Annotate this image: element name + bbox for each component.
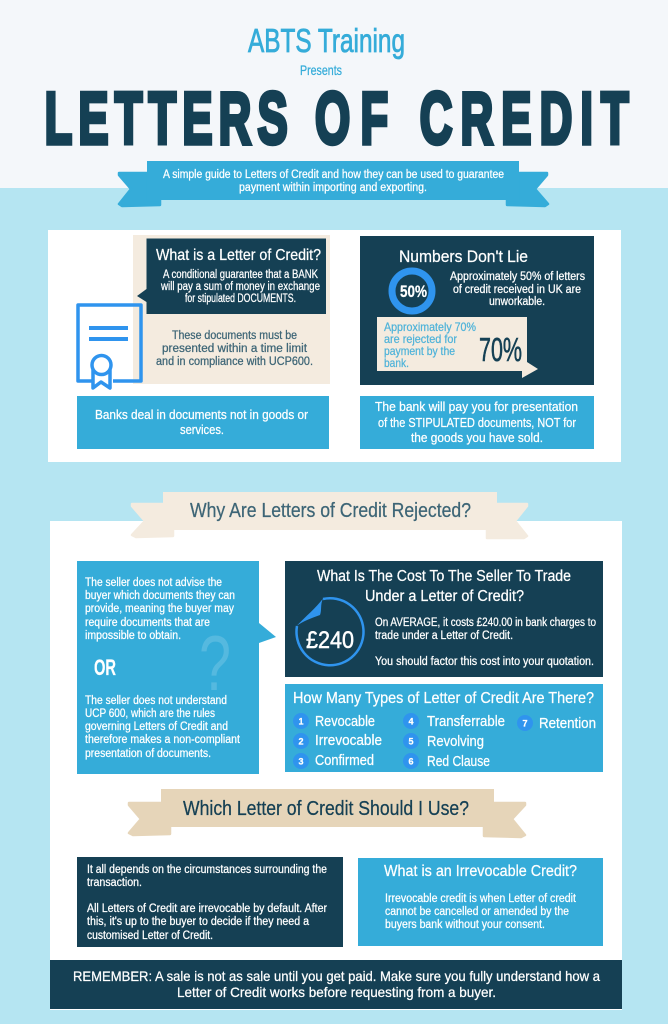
banner: which letter of credit should I use: Which Letter of Credit Should I Use? xyxy=(183,798,469,820)
list item 4: Transferrable xyxy=(427,714,505,730)
callout: reasons for rejection: impossible to obtain. xyxy=(85,630,181,642)
callout: what is a letter of credit xyxy=(137,238,326,314)
panel: numbers don't lie xyxy=(360,236,594,385)
list item 4 xyxy=(403,713,505,730)
title: OF xyxy=(315,77,388,159)
panel: numbers don't lie: of credit received in UK are xyxy=(453,284,581,296)
panel: beige backing xyxy=(133,235,330,384)
list item 2: 2 xyxy=(298,736,304,746)
callout: banks deal in documents: Banks deal in documents not in goods or xyxy=(95,407,309,422)
panel: cost to the seller: You should factor this cost into your quotation. xyxy=(375,656,594,668)
title: CREDIT xyxy=(420,77,629,159)
list item 6: Red Clause xyxy=(427,754,490,770)
panel: numbers don't lie: Numbers Don't Lie xyxy=(399,247,528,266)
panel: what is an irrevocable credit: buyers bank without your consent. xyxy=(385,919,545,931)
panel: it all depends xyxy=(77,857,343,947)
icon: certificate xyxy=(78,305,141,388)
list item 2: Irrevocable xyxy=(315,733,382,749)
ribbon: subtitle xyxy=(119,161,548,206)
panel: it all depends: this, it's up to the buyer to decide if they need a xyxy=(87,916,310,928)
panel: cost to the seller: What Is The Cost To The Seller To Trade xyxy=(317,568,571,585)
panel: lower white section xyxy=(50,521,622,1010)
list item 3 xyxy=(293,753,374,769)
callout: the bank will pay you xyxy=(360,396,594,449)
list item 1: 1 xyxy=(298,716,304,726)
callout: reasons for rejection: UCP 600, which are the rules xyxy=(85,708,215,720)
icon: £240 sticker xyxy=(296,598,364,665)
icon: £240 sticker: £240 xyxy=(306,627,354,654)
text: document requirements xyxy=(156,330,313,368)
panel: numbers don't lie: Approximately 50% of letters xyxy=(450,271,585,283)
list item 3: 3 xyxy=(298,756,304,766)
callout: reasons for rejection: require documents that are xyxy=(85,617,210,629)
panel: what is an irrevocable credit: Irrevocable credit is when Letter of credit xyxy=(385,893,577,905)
list item 7: Retention xyxy=(539,716,596,732)
panel: it all depends: transaction. xyxy=(87,877,142,889)
callout: reasons for rejection: The seller does not understand xyxy=(85,695,227,707)
list item 4: 4 xyxy=(408,716,414,726)
callout: 70% arrow xyxy=(377,317,538,378)
callout: reasons for rejection: buyer which documents they can xyxy=(85,590,235,602)
ribbon: subtitle: payment within importing and exporting. xyxy=(239,182,427,194)
banner: which letter of credit should I use xyxy=(129,789,525,837)
list item 1 xyxy=(293,713,375,730)
panel: what is an irrevocable credit: cannot be cancelled or amended by the xyxy=(385,906,569,918)
callout: 70% arrow: are rejected for xyxy=(384,332,457,346)
list item 5 xyxy=(403,733,484,750)
text: Presents: Presents xyxy=(300,62,342,78)
callout: what is a letter of credit: A conditional guarantee that a BANK xyxy=(163,269,318,281)
list item 6 xyxy=(403,753,490,770)
panel: cost to the seller: trade under a Letter of Credit. xyxy=(375,630,513,642)
panel: what is a letter of credit and numbers xyxy=(48,230,621,462)
icon: question mark: ? xyxy=(199,619,231,707)
callout: 70% arrow: payment by the xyxy=(384,344,455,358)
callout: 70% arrow: bank. xyxy=(384,356,409,370)
title xyxy=(45,77,629,159)
text: document requirements: These documents must be xyxy=(172,330,297,342)
callout: reasons for rejection: OR xyxy=(94,655,116,680)
callout: remember: Letter of Credit works before requesting from a buyer. xyxy=(177,984,496,1000)
list item 6: 6 xyxy=(408,756,414,766)
list item 5: Revolving xyxy=(427,734,484,750)
callout: what is a letter of credit: for stipulated DOCUMENTS. xyxy=(185,293,296,305)
panel: cost to the seller xyxy=(285,561,603,677)
callout: reasons for rejection: therefore makes a non-compliant xyxy=(85,734,241,746)
callout: the bank will pay you: the goods you have sold. xyxy=(411,430,543,445)
callout: banks deal in documents xyxy=(77,396,329,449)
heading: ABTS Training: ABTS Training xyxy=(248,22,405,59)
text: document requirements: and in compliance with UCP600. xyxy=(156,356,313,368)
callout: what is a letter of credit: will pay a sum of money in exchange xyxy=(160,281,320,293)
chart: 50% ring xyxy=(392,271,432,311)
callout: 70% arrow: 70% xyxy=(479,331,522,368)
callout: reasons for rejection: provide, meaning the buyer may xyxy=(85,603,234,615)
panel: what is an irrevocable credit: What is an Irrevocable Credit? xyxy=(384,863,577,880)
callout: remember xyxy=(50,960,622,1009)
list item 3: Confirmed xyxy=(315,753,374,769)
callout: the bank will pay you: The bank will pay you for presentation xyxy=(375,399,578,414)
callout: reasons for rejection: presentation of documents. xyxy=(85,748,211,760)
list item 7 xyxy=(517,715,596,732)
list item 1: Revocable xyxy=(315,714,375,730)
panel: what is an irrevocable credit xyxy=(358,858,603,946)
list item 7: 7 xyxy=(522,718,528,728)
panel: it all depends: All Letters of Credit are irrevocable by default. After xyxy=(87,903,327,915)
panel: types of letter of credit: How Many Types of Letter of Credit Are There? xyxy=(293,690,594,707)
panel: types of letter of credit xyxy=(285,684,603,772)
callout: banks deal in documents: services. xyxy=(180,422,224,437)
panel: cost to the seller: On AVERAGE, it costs £240.00 in bank charges to xyxy=(375,617,596,629)
callout: the bank will pay you: of the STIPULATED documents, NOT for xyxy=(378,415,577,430)
callout: what is a letter of credit: What is a Letter of Credit? xyxy=(156,247,321,264)
panel: numbers don't lie: unworkable. xyxy=(489,296,545,308)
panel: it all depends: It all depends on the circumstances surrounding the xyxy=(87,864,327,876)
banner: why are letters of credit rejected xyxy=(132,492,527,538)
chart: 50% ring: 50% xyxy=(400,282,427,301)
callout: 70% arrow: Approximately 70% xyxy=(384,320,476,334)
callout: reasons for rejection: governing Letters of Credit and xyxy=(85,721,228,733)
panel: cost to the seller: Under a Letter of Credit? xyxy=(365,588,524,605)
text: document requirements: presented within a time limit xyxy=(162,343,308,355)
callout: remember: REMEMBER: A sale is not as sale until you get paid. Make sure you fully understand how a xyxy=(73,968,600,984)
panel: it all depends: customised Letter of Credit. xyxy=(87,930,213,942)
banner: why are letters of credit rejected: Why Are Letters of Credit Rejected? xyxy=(190,500,471,522)
callout: reasons for rejection xyxy=(77,561,276,774)
list item 5: 5 xyxy=(408,736,414,746)
callout: reasons for rejection: The seller does not advise the xyxy=(85,577,222,589)
ribbon: subtitle: A simple guide to Letters of Credit and how they can be used to guarantee xyxy=(163,169,504,181)
title: LETTERS xyxy=(45,77,288,159)
